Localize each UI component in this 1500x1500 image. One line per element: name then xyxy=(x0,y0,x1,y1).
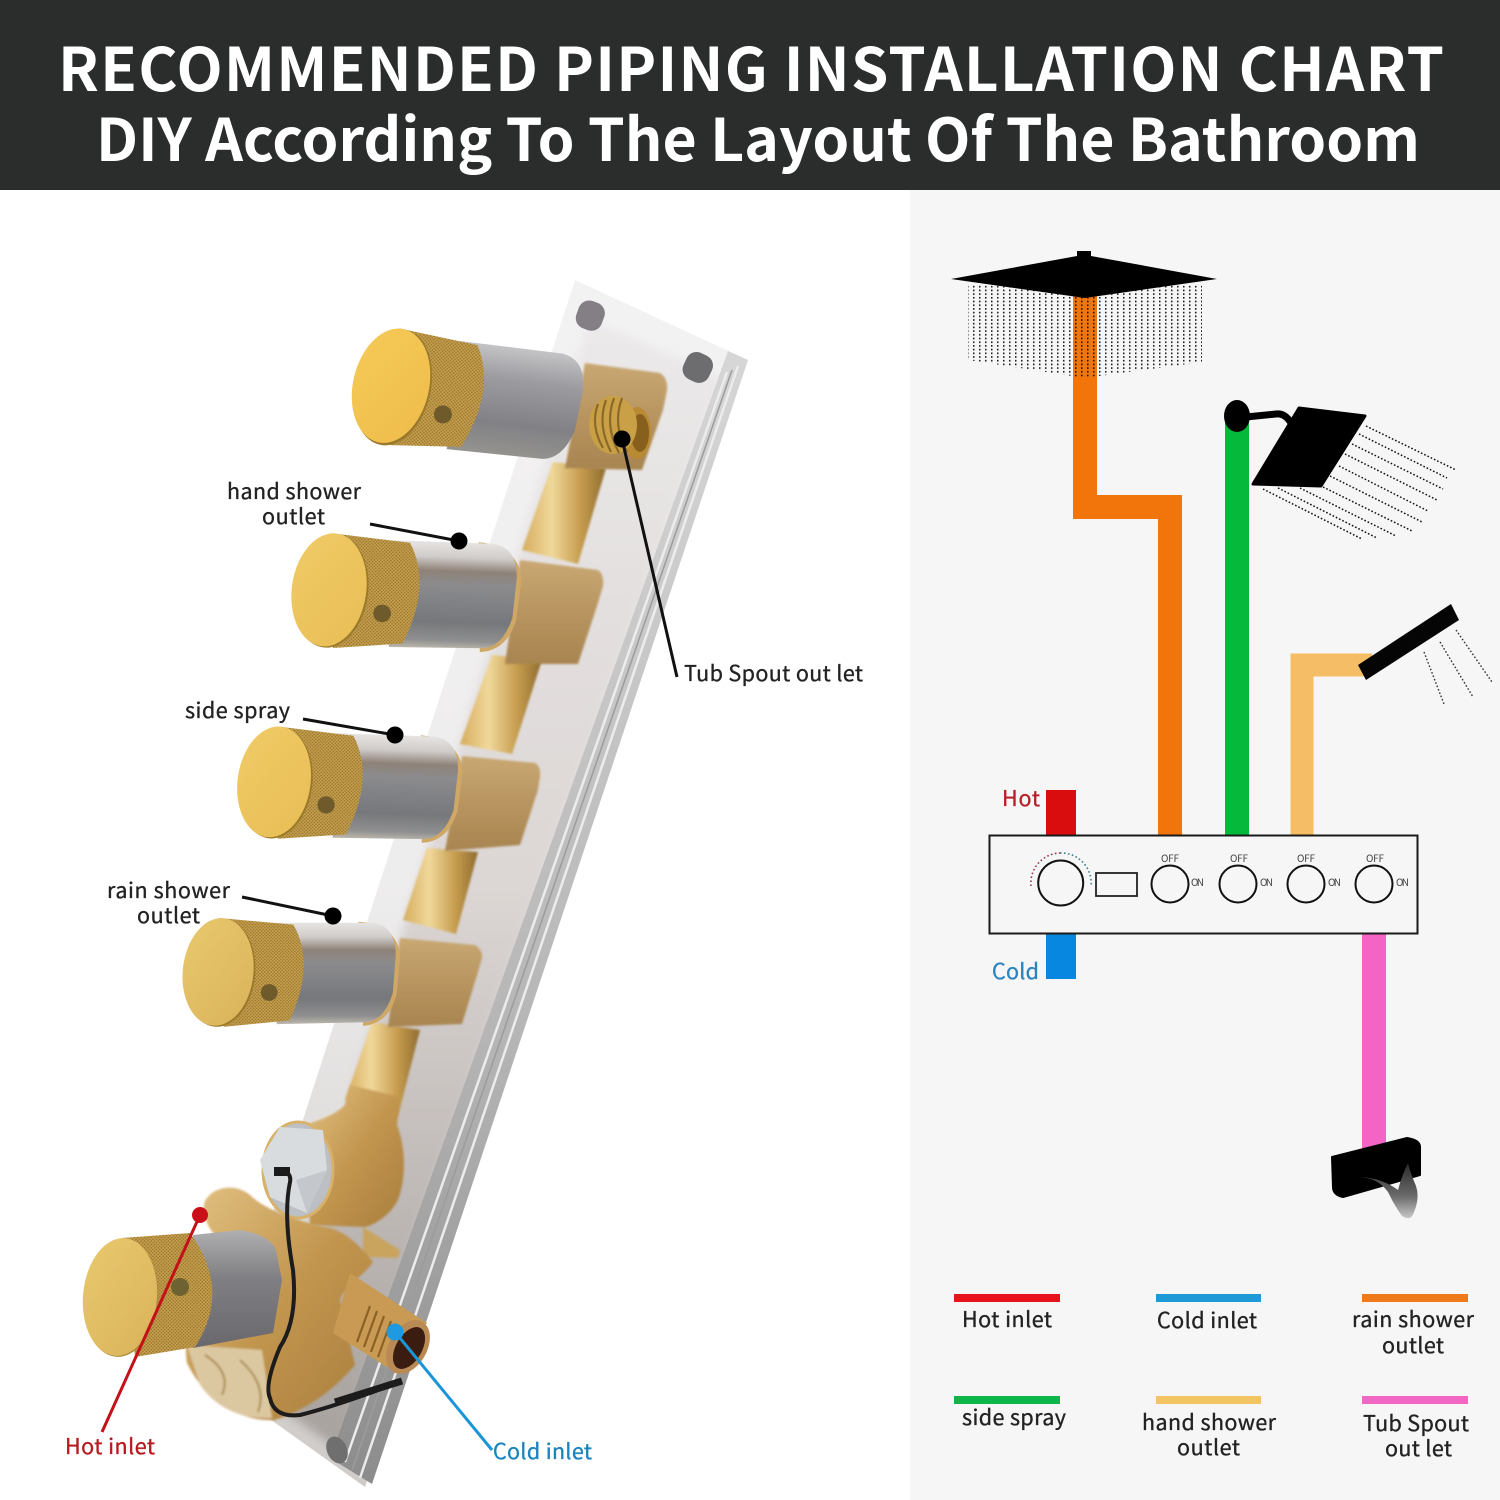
callout: hand shower outlet xyxy=(227,475,468,550)
callout: side spray: side spray xyxy=(185,694,290,725)
panel: valve photo illustration xyxy=(78,280,748,1487)
switch one: ON xyxy=(1191,874,1204,889)
callout: rain shower outlet: outlet xyxy=(137,899,200,930)
display xyxy=(1096,873,1137,896)
pipe: side spray xyxy=(1225,420,1249,835)
brass pipes xyxy=(345,462,606,1116)
switch two xyxy=(1220,850,1273,902)
legend: side spray: side spray xyxy=(962,1401,1066,1432)
pipe: hand shower xyxy=(1302,665,1372,835)
pipe: cold inlet xyxy=(1046,934,1076,979)
title line one: RECOMMENDED PIPING INSTALLATION CHART xyxy=(58,22,1444,109)
knob three xyxy=(230,721,464,849)
mixing valve upper body xyxy=(305,1085,404,1258)
legend: hand shower outlet: outlet xyxy=(1177,1431,1240,1462)
legend: hot inlet: Hot inlet xyxy=(962,1303,1052,1334)
pipe: tub spout xyxy=(1362,934,1386,1150)
switch two: ON xyxy=(1260,874,1273,889)
callout: cold inlet: Cold inlet xyxy=(493,1435,592,1466)
callout: tub spout out let: Tub Spout out let xyxy=(684,657,863,688)
tub spout xyxy=(1332,1138,1420,1218)
mounting plate xyxy=(218,280,748,1487)
legend: cold inlet: Cold inlet xyxy=(1157,1304,1257,1335)
legend: rain shower outlet xyxy=(1352,1294,1475,1360)
legend: tub spout out let: Tub Spout xyxy=(1363,1407,1469,1438)
label: cold: Cold xyxy=(992,955,1039,986)
pipe: rain shower xyxy=(1085,296,1170,835)
callout: cold inlet xyxy=(386,1324,592,1466)
switch three xyxy=(1288,850,1341,902)
panel: piping diagram xyxy=(910,190,1500,1500)
control panel xyxy=(990,836,1418,934)
mixing valve lower body xyxy=(186,1188,373,1420)
legend: tub spout out let xyxy=(1362,1396,1469,1463)
knob one xyxy=(340,319,588,472)
legend xyxy=(954,1294,1475,1463)
callout: side spray xyxy=(185,694,404,744)
knob five xyxy=(78,1230,282,1360)
switch one: OFF xyxy=(1161,850,1179,865)
rain shower head xyxy=(951,251,1217,378)
callout: hand shower outlet: hand shower xyxy=(227,475,362,506)
switch four: ON xyxy=(1396,874,1409,889)
switch three: OFF xyxy=(1297,850,1315,865)
callout: rain shower outlet: rain shower xyxy=(107,874,231,905)
legend: hand shower outlet xyxy=(1142,1396,1277,1462)
callout: hand shower outlet: outlet xyxy=(262,500,325,531)
header banner xyxy=(0,0,1500,190)
legend: rain shower outlet: outlet xyxy=(1382,1329,1444,1360)
legend: hot inlet xyxy=(954,1294,1060,1334)
switch two: OFF xyxy=(1230,850,1248,865)
inlet threaded fitting xyxy=(333,1273,439,1382)
callout: hot inlet xyxy=(65,1207,208,1461)
callout: hot inlet: Hot inlet xyxy=(65,1430,155,1461)
brass valve bodies xyxy=(388,363,667,1027)
gray hex plug xyxy=(260,1122,333,1218)
title line two: DIY According To The Layout Of The Bathroom xyxy=(96,93,1420,178)
black wire xyxy=(268,1170,402,1415)
callout: rain shower outlet xyxy=(107,874,342,930)
switch four: OFF xyxy=(1366,850,1384,865)
callout: tub spout out let xyxy=(614,430,863,688)
tub spout fitting xyxy=(589,396,651,459)
legend: hand shower outlet: hand shower xyxy=(1142,1406,1277,1437)
switch four xyxy=(1356,850,1409,902)
knob four xyxy=(177,915,400,1030)
legend: tub spout out let: out let xyxy=(1385,1432,1452,1463)
label: hot: Hot xyxy=(1002,782,1040,813)
legend: rain shower outlet: rain shower xyxy=(1352,1303,1475,1334)
switch three: ON xyxy=(1328,874,1341,889)
switch one xyxy=(1152,850,1204,902)
temperature dial xyxy=(1031,853,1091,906)
side shower head xyxy=(1224,400,1456,539)
knob two xyxy=(284,528,523,658)
hand shower head xyxy=(1358,604,1492,704)
pipe: hot inlet xyxy=(1046,790,1076,835)
